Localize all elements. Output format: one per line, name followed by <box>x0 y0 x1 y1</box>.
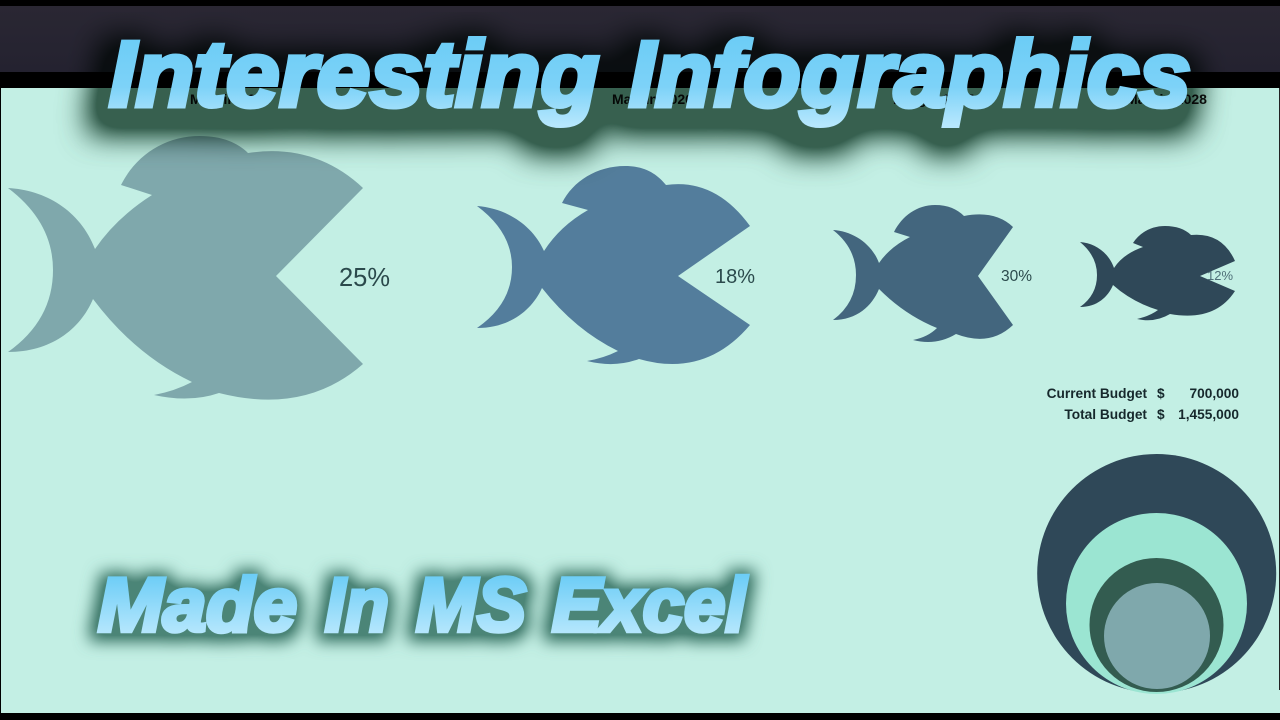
subtitle glow: Excel <box>552 563 748 648</box>
fish 3: 30%: 30% <box>1001 268 1032 285</box>
top dark bar <box>0 6 1280 72</box>
budget table: Current Budget <box>1047 386 1147 401</box>
column heading: Margin 2025: Margin 2025 <box>190 91 271 107</box>
title: Interesting <box>109 22 599 126</box>
column heading: Margin 2027: Margin 2027 <box>893 91 974 107</box>
budget table: 700,000 <box>1190 386 1239 401</box>
column heading: Margin 2028: Margin 2028 <box>1126 91 1207 107</box>
subtitle glow: Made <box>98 563 297 648</box>
subtitle: Made <box>98 563 297 648</box>
subtitle: In <box>325 563 389 648</box>
subtitle: Excel <box>552 563 748 648</box>
subtitle: MS <box>416 563 526 648</box>
budget table: Total Budget <box>1064 407 1147 422</box>
title glow: Interesting <box>109 22 599 126</box>
title glow: Infographics <box>629 22 1191 126</box>
budget table: $ <box>1157 386 1165 401</box>
subtitle glow: In <box>325 563 389 648</box>
fish 1: 25%: 25% <box>339 264 390 292</box>
title: Infographics <box>629 22 1191 126</box>
subtitle glow <box>98 563 748 648</box>
title <box>109 22 1191 126</box>
budget table <box>1047 386 1239 422</box>
subtitle <box>98 563 748 648</box>
budget table: $ <box>1157 407 1165 422</box>
budget table: 1,455,000 <box>1178 407 1239 422</box>
column heading: Margin 2026: Margin 2026 <box>612 91 693 107</box>
fish 1: 25% <box>8 136 390 400</box>
fish 4: 12%: 12% <box>1207 268 1233 283</box>
fish 2: 18%: 18% <box>715 266 755 288</box>
fish 3: 30% <box>833 205 1032 342</box>
fish 4: 12% <box>1080 226 1235 320</box>
title glow <box>109 22 1191 126</box>
fish 2: 18% <box>477 166 755 364</box>
subtitle glow: MS <box>416 563 526 648</box>
nested budget circles <box>1037 454 1276 694</box>
